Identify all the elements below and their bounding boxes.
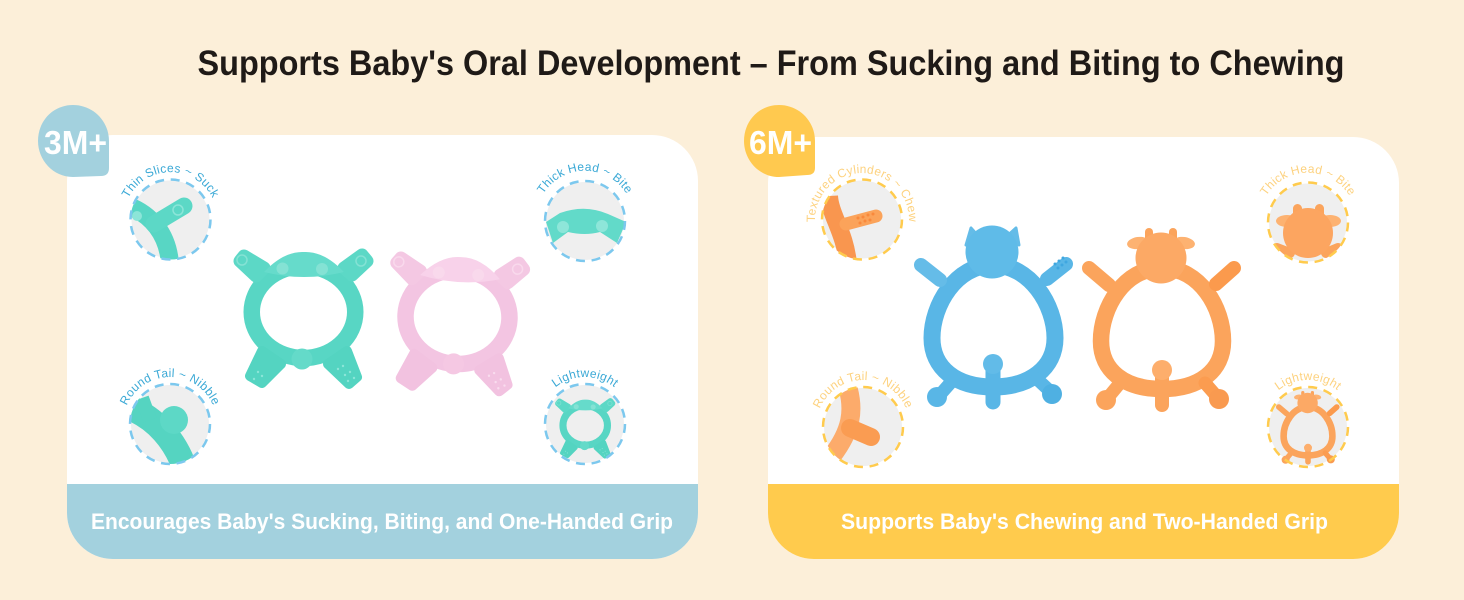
title: Supports Baby's Oral Development – From Sucking and Biting to Chewing xyxy=(198,44,1344,83)
callout: Thick Head: Thick Head ~ Bite xyxy=(536,163,631,193)
badge: 6M+ xyxy=(744,105,815,177)
callout: Lightweight: Lightweight xyxy=(551,370,618,388)
callout: Lightweight xyxy=(544,370,626,466)
caption band: 3M+: Encourages Baby's Sucking, Biting, and One-Handed Grip xyxy=(91,509,673,534)
callout: Round Tail (orange): Round Tail ~ Nibble xyxy=(812,371,911,408)
callout: Thick Head (cow): Thick Head ~ Bite xyxy=(1260,165,1354,195)
callout: Thick Head xyxy=(536,163,631,262)
teether: teal xyxy=(237,252,367,384)
callout: Textured Cylinders xyxy=(806,164,916,261)
callout: Textured Cylinders: Textured Cylinders ~ Chew xyxy=(806,164,916,222)
callout: Thick Head (cow) xyxy=(1260,165,1354,264)
badge: 3M+: 3M+ xyxy=(44,124,107,161)
badge: 6M+: 6M+ xyxy=(749,124,812,161)
panel: 6M+ stage xyxy=(744,105,1399,559)
teether: pink xyxy=(387,254,524,392)
callout: Round Tail xyxy=(120,368,218,466)
panel background xyxy=(67,135,698,559)
callout: Round Tail (orange) xyxy=(812,371,911,468)
callout: Thin Slices xyxy=(121,165,218,261)
teether: blue xyxy=(921,226,1068,407)
callout: Lightweight (orange): Lightweight xyxy=(1274,372,1341,390)
callout: Lightweight (orange) xyxy=(1266,372,1350,468)
teether: orange xyxy=(1089,228,1234,410)
callout: Thin Slices: Thin Slices ~ Suck xyxy=(121,165,218,198)
panel: 3M+ stage xyxy=(38,105,698,559)
callout: Round Tail: Round Tail ~ Nibble xyxy=(120,368,218,405)
badge: 3M+ xyxy=(38,105,109,177)
caption band: 6M+: Supports Baby's Chewing and Two-Handed Grip xyxy=(841,509,1328,534)
caption band: 6M+ xyxy=(768,484,1399,559)
caption band: 3M+ xyxy=(67,484,698,559)
panel background xyxy=(768,137,1399,559)
